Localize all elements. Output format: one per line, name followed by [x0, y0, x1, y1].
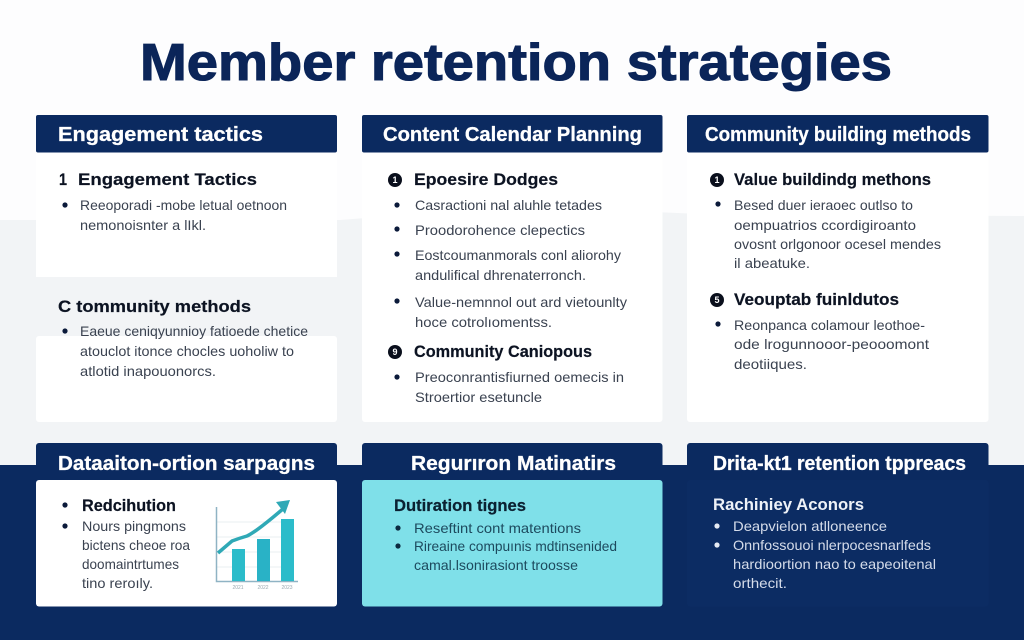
text block: value building [710, 170, 941, 271]
heading: regulation [362, 443, 662, 480]
text block: duration list: Rireaine compuınis mdtinsenided [414, 538, 617, 554]
title: Member retention strategies [140, 34, 892, 92]
text block: reduction list: doomaintrtumes [82, 556, 179, 572]
text block: first list: Casractioni nal aluhle tetades [415, 197, 602, 213]
text block: reduction list: bictens cheoe roa [82, 537, 190, 553]
text block: second list: Stroertior esetuncle [415, 389, 542, 405]
heading: regulation: Regurıron Matinatirs [411, 453, 616, 475]
text block: value building: Value buildindg methons [734, 170, 931, 189]
text block: reduction list: tino reroıly. [82, 575, 153, 591]
text block: engagement tactics list: nemonoisnter a lIkl. [80, 217, 206, 233]
text block: second list: Preoconrantisfiurned oemecis in [415, 369, 624, 385]
bar chart with rising arrow: 2023 [281, 585, 293, 591]
text block: community methods list: Eaeue ceniqyunnioy fatioede chetice [80, 323, 308, 339]
text block: first list: andulifical dhrenaterronch. [415, 267, 586, 283]
text block: approaches list: Deapvielon atlloneence [733, 518, 887, 534]
heading: engagement tactics: Engagement tactics [58, 124, 263, 146]
panel: content calendar planning [362, 115, 662, 422]
heading: community building methods [687, 115, 988, 152]
text block: reduction list: Nours pingmons [82, 518, 186, 534]
text block: second methods: 5 [714, 295, 720, 305]
text block: value building: 1 [714, 175, 720, 185]
text block: duration list: Dutiration tignes [394, 496, 526, 515]
text block: second methods: deotiiques. [734, 356, 807, 372]
heading: data campaigns [36, 443, 337, 480]
text block: second methods [710, 290, 929, 372]
text block: first list: 1 [392, 175, 398, 185]
bar chart with rising arrow: 2022 [257, 585, 269, 591]
text block: engagement tactics list: Engagement Tactics [78, 170, 257, 189]
text block: value building: ovosnt orlgonoor ocesel mendes [734, 236, 941, 252]
text block: second list: 9 [392, 347, 398, 357]
text block: first list: Proodorohence clepectics [415, 222, 585, 238]
text block: second methods: ode lrogunnooor-peooomont [734, 336, 929, 352]
text block: value building: il abeatuke. [734, 255, 810, 271]
text block: approaches list [713, 495, 936, 591]
text block: duration list: Reseftint cont matentions [414, 520, 581, 536]
panel: engagement tactics [36, 115, 337, 422]
heading: retention approaches [687, 443, 988, 480]
text block: first list: Value-nemnnol out ard vietounlty [415, 294, 627, 310]
text block: approaches list: hardioortion nao to eapeoitenal [733, 556, 936, 572]
text block: community methods list: atouclot itonce chocles uoholiw to [80, 343, 294, 359]
text block: second methods: Reonpanca colamour leothoe- [734, 317, 925, 333]
text block: value building: Besed duer ieraoec outlso to [734, 197, 913, 213]
text block: duration list: camal.lsonirasiont troosse [414, 557, 578, 573]
text block: reduction list [62, 496, 190, 591]
text block: duration list [394, 496, 617, 573]
text block: first list: Epoesire Dodges [414, 170, 558, 189]
bar chart with rising arrow [216, 500, 298, 591]
text block: engagement tactics list: Reeoporadi -mobe letual oetnoon [80, 197, 287, 213]
panel: community building methods [687, 115, 988, 422]
panel: data campaigns [36, 443, 337, 606]
text block: engagement tactics list [59, 170, 287, 233]
text block: second list [388, 342, 624, 405]
text block: reduction list: Redcihution [82, 496, 176, 515]
text block: second methods: Veouptab fuinldutos [734, 290, 899, 309]
text block: first list: hoce cotrolıomentss. [415, 314, 552, 330]
panel: retention approaches [687, 443, 988, 606]
text block: community methods list [58, 297, 308, 379]
text block: approaches list: Onnfossouoi nlerpocesnarlfeds [733, 537, 931, 553]
text block: approaches list: orthecit. [733, 575, 787, 591]
heading: content calendar planning [362, 115, 662, 152]
text block: community methods list: C tommunity methods [58, 297, 251, 316]
heading: data campaigns: Dataaiton-ortion sarpagns [58, 453, 315, 475]
heading: engagement tactics [36, 115, 337, 152]
text block: second list: Community Caniopous [414, 342, 592, 361]
bar chart with rising arrow: 2021 [232, 585, 244, 591]
text block: first list: Eostcoumanmorals conl aliorohy [415, 247, 621, 263]
text block: engagement tactics list: 1 [59, 170, 67, 189]
heading: community building methods: Community building methods [705, 124, 971, 146]
text block: first list [388, 170, 627, 330]
text block: community methods list: atlotid inapouonorcs. [80, 363, 216, 379]
text block: value building: oempuatrios ccordigiroanto [734, 217, 916, 233]
panel: regulation [362, 443, 662, 606]
heading: retention approaches: Drita-kt1 retention tppreacs [713, 453, 966, 475]
heading: content calendar planning: Content Calendar Planning [383, 124, 642, 146]
text block: approaches list: Rachiniey Aconors [713, 495, 864, 514]
